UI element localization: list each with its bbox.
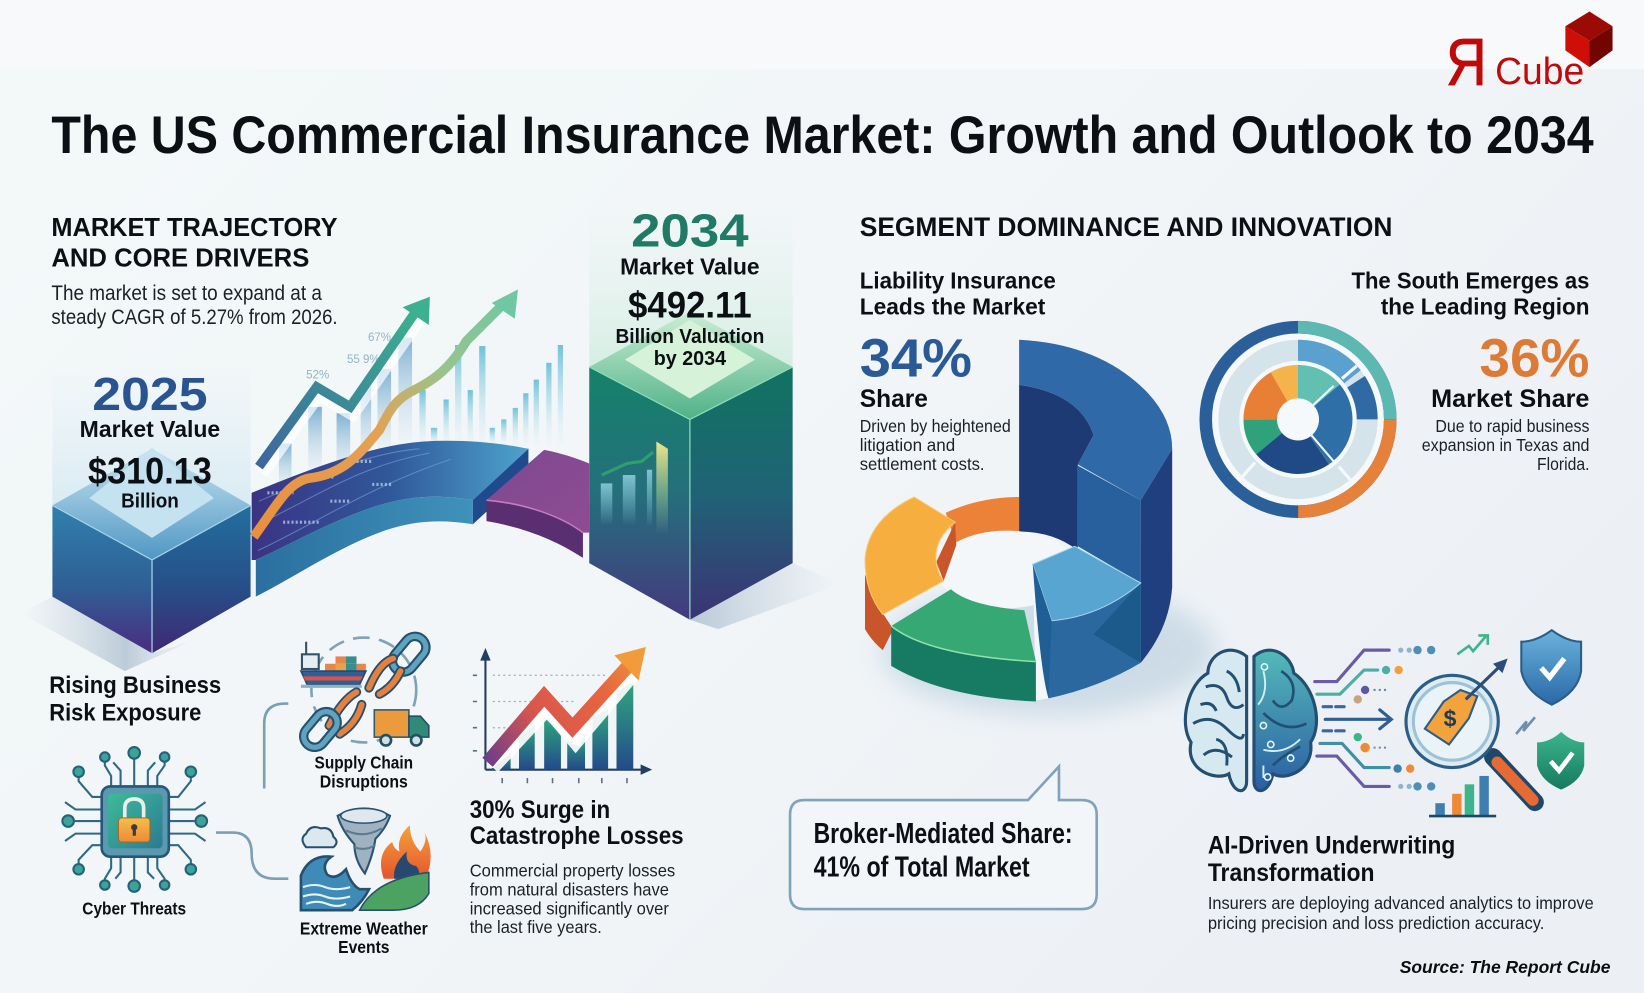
inner ring xyxy=(1245,366,1351,473)
2034 label: by 2034 xyxy=(654,348,726,370)
panel: liability insurance text: litigation and xyxy=(860,435,955,455)
column: 2034 market value xyxy=(589,199,793,620)
shield: blue xyxy=(1521,630,1581,705)
source note: Source: The Report Cube xyxy=(1400,957,1611,977)
connectors between risks xyxy=(216,704,288,879)
panel: liability insurance text xyxy=(860,267,1056,474)
text: AI-driven underwriting xyxy=(1208,832,1594,933)
label: supply chain disruptions: Supply Chain xyxy=(315,753,413,773)
text: CAGR description: steady CAGR of 5.27% from 2026. xyxy=(51,306,338,329)
small percent labels: 67% xyxy=(368,332,391,344)
data flow lines xyxy=(1315,650,1391,786)
panel: south region text: expansion in Texas and xyxy=(1422,435,1589,455)
chart: growth bridge between 2025 and 2034 xyxy=(21,289,841,671)
label: cyber threats: Cyber Threats xyxy=(82,898,186,918)
callout text: catastrophe losses xyxy=(470,796,684,937)
callout: broker-mediated share xyxy=(790,767,1097,909)
icon: AI underwriting xyxy=(1185,630,1584,817)
callout text: catastrophe losses: Commercial property losses xyxy=(470,861,675,881)
ground xyxy=(360,872,429,910)
label: extreme weather events: Extreme Weather xyxy=(300,918,428,938)
2034 label xyxy=(615,204,764,370)
panel: market trajectory heading: AND CORE DRIVERS xyxy=(51,242,309,272)
mini bar chart xyxy=(1429,776,1496,817)
axes xyxy=(473,648,652,783)
2025 label: 2025 xyxy=(92,368,208,420)
panel: south region text xyxy=(1351,267,1590,474)
panel: rising business risk heading: Risk Exposure xyxy=(49,699,201,726)
chain links xyxy=(299,632,430,752)
green segment xyxy=(891,589,1036,701)
small percent labels: 52% xyxy=(306,370,329,382)
label: extreme weather events xyxy=(300,918,428,957)
outer ring xyxy=(1206,327,1390,512)
2034 label: Billion Valuation xyxy=(615,326,764,348)
translucent bars xyxy=(279,338,563,498)
callout text: catastrophe losses: 30% Surge in xyxy=(470,796,610,824)
panel: liability insurance text: 34% xyxy=(860,329,972,388)
small trend marks xyxy=(1457,635,1535,734)
large blue segment walls xyxy=(1019,385,1172,663)
wave xyxy=(301,856,369,910)
label: extreme weather events: Events xyxy=(338,937,390,957)
shield: green xyxy=(1537,732,1584,790)
mini bars on column xyxy=(601,441,668,535)
2025 label: $310.13 xyxy=(88,450,212,491)
panel: market trajectory heading xyxy=(51,212,338,272)
middle ring xyxy=(1202,324,1394,515)
growth arrow 1 xyxy=(259,297,430,473)
icon: supply chain disruptions xyxy=(299,632,430,752)
panel: liability insurance text: Driven by heightened xyxy=(860,416,1011,436)
label: supply chain disruptions xyxy=(315,753,413,791)
chart: catastrophe losses xyxy=(473,647,652,783)
panel: market trajectory heading: MARKET TRAJECTORY xyxy=(51,212,338,242)
magnifier with price tag: $ xyxy=(1444,706,1457,732)
panel: liability insurance text: Leads the Market xyxy=(860,294,1046,320)
text: CAGR description: The market is set to expand at a xyxy=(51,282,322,305)
column shadows xyxy=(21,563,841,671)
small percent labels: 55 9% xyxy=(347,354,380,366)
data flow dots xyxy=(1354,646,1435,791)
2034 label: 2034 xyxy=(631,204,749,256)
large blue segment top xyxy=(1019,340,1172,500)
2034 label: Market Value xyxy=(620,254,760,280)
panel: liability insurance text: Liability Insurance xyxy=(860,267,1056,293)
bars xyxy=(491,682,633,770)
panel: rising business risk heading xyxy=(49,672,221,726)
text: AI-driven underwriting: AI-Driven Underwriting xyxy=(1208,832,1455,860)
ship xyxy=(301,642,366,688)
label: supply chain disruptions: Disruptions xyxy=(320,771,408,791)
chart: 3D donut xyxy=(865,340,1216,715)
brain xyxy=(1185,650,1316,791)
small percent labels xyxy=(306,332,391,382)
magnifier with price tag xyxy=(1406,659,1535,802)
panel: south region text: Due to rapid business xyxy=(1435,416,1590,436)
cloud xyxy=(302,827,337,847)
text: AI-driven underwriting: Insurers are deploying advanced analytics to improve xyxy=(1208,893,1594,913)
panel: liability insurance text: Share xyxy=(860,385,928,413)
orange back segment xyxy=(946,497,1019,545)
callout text: catastrophe losses: Catastrophe Losses xyxy=(470,822,684,850)
2025 label xyxy=(80,368,220,513)
callout text: catastrophe losses: from natural disasters have xyxy=(470,879,669,899)
2025 label: Billion xyxy=(121,491,179,513)
truck xyxy=(374,710,429,746)
2025 label: Market Value xyxy=(80,416,220,442)
icon: cyber threats chip xyxy=(62,747,207,892)
tornado xyxy=(338,808,390,873)
yellow segment xyxy=(865,497,956,650)
logo: RCube: Я xyxy=(1446,25,1487,100)
logo: RCube xyxy=(1446,12,1613,100)
panel: rising business risk heading: Rising Business xyxy=(49,672,221,699)
text: AI-driven underwriting: pricing precision and loss prediction accuracy. xyxy=(1208,913,1544,933)
panel: south region text: Florida. xyxy=(1537,454,1589,474)
heading: segment dominance: SEGMENT DOMINANCE AND INNOVATION xyxy=(860,211,1392,242)
panel: south region text: the Leading Region xyxy=(1381,294,1589,320)
callout text: catastrophe losses: the last five years. xyxy=(470,917,602,937)
purple ribbon xyxy=(486,450,589,558)
hole xyxy=(936,531,1077,608)
panel: liability insurance text: settlement costs. xyxy=(860,454,985,474)
text: CAGR description xyxy=(51,282,338,329)
callout: broker-mediated share: Broker-Mediated Share: xyxy=(814,817,1073,849)
logo: RCube: Cube xyxy=(1495,50,1584,92)
light blue segment xyxy=(1033,546,1141,700)
callout: broker-mediated share: 41% of Total Market xyxy=(814,851,1030,883)
column: 2025 market value xyxy=(52,362,251,653)
donut shadow xyxy=(881,585,1216,715)
icon: extreme weather events xyxy=(301,808,431,910)
growth arrow 2 xyxy=(254,289,518,537)
panel: south region text: The South Emerges as xyxy=(1351,267,1589,293)
text: AI-driven underwriting: Transformation xyxy=(1208,859,1375,887)
trend arrow xyxy=(488,647,646,767)
chart: regional ring xyxy=(1199,321,1397,518)
fire xyxy=(381,825,431,879)
2034 label: $492.11 xyxy=(628,285,752,326)
blue ribbon xyxy=(252,441,528,597)
panel: south region text: Market Share xyxy=(1431,385,1589,413)
callout text: catastrophe losses: increased significantly over xyxy=(470,898,669,918)
panel: south region text: 36% xyxy=(1479,329,1589,388)
